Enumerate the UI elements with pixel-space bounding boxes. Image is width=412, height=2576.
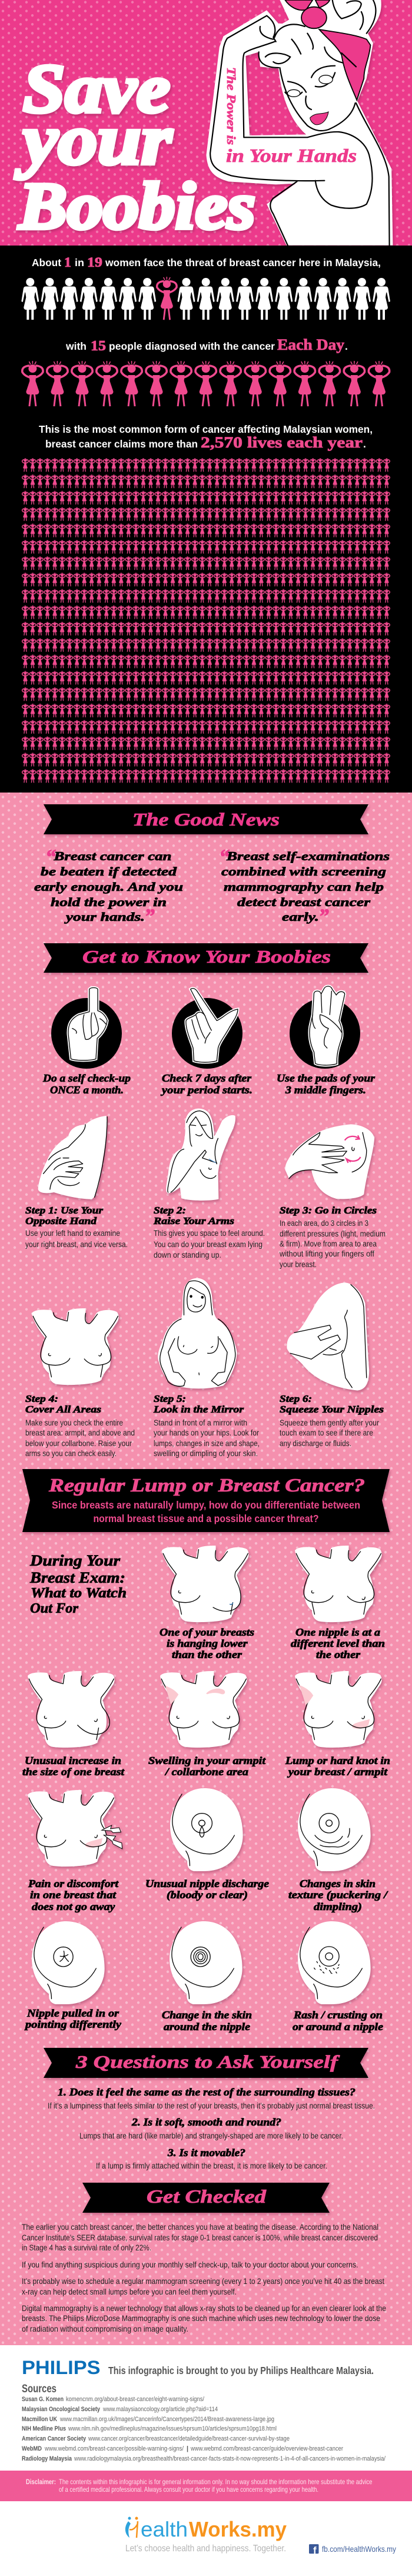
text: 2,570 lives each year: 2,570 lives each year <box>201 434 363 451</box>
symptom: rash: Rash / crusting on <box>293 2009 383 2021</box>
sources: WebMD <box>22 2445 42 2452</box>
sources: Radiology Malaysia <box>22 2455 72 2462</box>
text: 2,570 lives each year <box>39 423 373 451</box>
step 6 text <box>280 1393 384 1448</box>
step 4 text: Make sure you check the entire <box>25 1418 123 1427</box>
pictogram: 15 women <box>22 361 390 406</box>
symptom: skin around nipple: Change in the skin <box>162 2009 252 2021</box>
step 5 text <box>153 1393 260 1458</box>
logo: Philips: PHILIPS <box>22 2357 100 2378</box>
question 2: 2. Is it soft, smooth and round? <box>131 2116 281 2128</box>
banner: The Good News: The Good News <box>132 809 280 830</box>
quote: left: ” <box>144 904 155 928</box>
sources: | <box>187 2445 188 2452</box>
sources: www.nlm.nih.gov/medlineplus/magazine/issues/sprsum10/articles/sprsum10pg18.html <box>68 2425 277 2432</box>
step 1 text <box>25 1205 128 1249</box>
quote: right: ” <box>318 904 329 928</box>
symptom: discharge <box>145 1788 269 1901</box>
text: 1 in 19 women: 1 <box>64 255 71 270</box>
disclaimer band: of a certified medical professional. Always consult your doctor if you have concerns regarding your health. <box>59 2485 318 2494</box>
step 5 text: your hands on your hips. Look for <box>154 1428 259 1437</box>
text: get checked paragraphs <box>22 2222 386 2333</box>
step 1 text: your right breast, and vice versa. <box>25 1239 128 1249</box>
panel: hero <box>0 0 412 246</box>
quote: left: be beaten if detected <box>41 864 177 878</box>
symptom: discharge: Unusual nipple discharge <box>145 1878 269 1889</box>
question 2 <box>79 2116 343 2140</box>
quote: left: your hands. <box>64 910 145 924</box>
quote: right: early. <box>282 910 319 924</box>
step 3 text: & firm). Move from area to area <box>280 1239 377 1248</box>
symptom: one breast lower <box>160 1546 254 1660</box>
title: Save your Boobies: Save <box>23 50 170 127</box>
sources: www.webmd.com/breast-cancer/possible-warning-signs/ <box>44 2445 184 2452</box>
symptom: one breast lower: than the other <box>172 1649 242 1660</box>
quote: left: “ <box>45 845 56 868</box>
text: 2,570 lives each year: This is the most common form of cancer affecting Malaysian women, <box>39 423 373 435</box>
symptom: one breast lower: is hanging lower <box>167 1637 248 1649</box>
heading: During Your Breast Exam: Breast Exam: <box>29 1569 125 1586</box>
symptom: increase in size <box>22 1671 125 1778</box>
banner: Regular Lump or Breast Cancer: normal breast tissue and a possible cancer threat? <box>93 1513 319 1524</box>
text: get checked paragraphs: If you find anything suspicious during your monthly self check-up, talk to your doctor about your concerns. <box>22 2260 358 2269</box>
captions: self check tips: Check 7 days after <box>162 1072 252 1084</box>
facebook link <box>309 2544 396 2556</box>
symptom: nipple different level: the other <box>316 1649 360 1660</box>
banner: The Good News <box>44 804 368 834</box>
symptom: skin texture: texture (puckering / <box>288 1889 389 1901</box>
step 6 text: Step 6: <box>280 1393 312 1404</box>
step 2 text: Raise Your Arms <box>153 1215 234 1226</box>
text: 2,570 lives each year: breast cancer claims more than <box>45 438 198 450</box>
question 1 <box>48 2086 375 2110</box>
question 3 <box>96 2147 327 2170</box>
symptom: lump: your breast / armpit <box>287 1766 388 1778</box>
banner: Get Checked: Get Checked <box>147 2186 267 2207</box>
banner: Regular Lump or Breast Cancer: Regular Lump or Breast Cancer? <box>48 1474 365 1496</box>
symptom: nipple different level: different level than <box>291 1637 385 1649</box>
step 6 text: Squeeze Your Nipples <box>280 1404 384 1415</box>
disclaimer band: Disclaimer: <box>26 2478 56 2486</box>
symptom: one breast lower: One of your breasts <box>160 1626 254 1638</box>
step 5 text: swelling or dimpling of your skin. <box>154 1448 258 1458</box>
symptom: skin around nipple <box>162 1921 252 2033</box>
sources: Macmillon UK <box>22 2416 57 2423</box>
pictogram: 1 in 19 women <box>21 277 390 320</box>
symptom: increase in size: Unusual increase in <box>25 1755 121 1766</box>
quote: left: early enough. And you <box>34 880 183 894</box>
facebook link: fb.com/HealthWorks.my <box>322 2544 396 2554</box>
captions: self check tips: ONCE a month. <box>50 1084 124 1096</box>
pictogram: grid of women <box>22 458 390 783</box>
symptom: nipple pulled in: pointing differently <box>24 2018 121 2030</box>
banner: Regular Lump or Breast Cancer <box>22 1469 390 1532</box>
step 4 text: Cover All Areas <box>25 1404 101 1415</box>
step 4 text <box>25 1393 135 1458</box>
step 5 text: Step 5: <box>154 1393 186 1404</box>
symptom: skin texture: dimpling) <box>314 1901 362 1912</box>
symptom: lump <box>285 1671 390 1778</box>
logo: HealthWorks.my: Let’s choose health and happiness. Together. <box>125 2544 286 2554</box>
symptom: discharge: (bloody or clear) <box>167 1889 248 1901</box>
text: 15 people each day: Each Day <box>277 336 344 353</box>
symptom: skin texture: Changes in skin <box>300 1878 376 1889</box>
heading: During Your Breast Exam: Out For <box>30 1601 79 1616</box>
step 4 text: below your collarbone. Raise your <box>25 1438 132 1448</box>
sources: NIH Medline Plus <box>22 2425 66 2432</box>
step 3 text: different pressures (light, medium <box>280 1229 386 1238</box>
banner: Regular Lump or Breast Cancer: Since breasts are naturally lumpy, how do you differentiate between <box>52 1499 360 1511</box>
symptom: rash <box>293 1921 383 2033</box>
symptom: pain: does not go away <box>32 1901 115 1912</box>
quote: right: “ <box>219 845 230 868</box>
symptom: nipple different level: One nipple is at a <box>295 1626 380 1638</box>
arm text: in Your Hands: in Your Hands <box>226 145 357 166</box>
question 1: 1. Does it feel the same as the rest of the surrounding tissues? <box>58 2086 355 2098</box>
icon: two finger hand <box>172 989 242 1069</box>
step 2 text: You can do your breast exam lying <box>154 1239 263 1249</box>
sources: www.macmillan.org.uk/Images/Cancerinfo/Cancertypes/2014/Breast-awareness-large.jpg <box>59 2416 274 2423</box>
text: 1 in 19 women: in <box>75 257 84 268</box>
illustration: step 1 <box>38 1116 107 1199</box>
heading: During Your Breast Exam <box>29 1552 127 1616</box>
question 3: 3. Is it movable? <box>167 2147 245 2159</box>
sources: Sources <box>22 2383 57 2395</box>
facebook link: f <box>313 2545 317 2556</box>
logo: HealthWorks.my: ealth <box>141 2517 188 2541</box>
sources <box>22 2383 386 2462</box>
symptom: swelling armpit: Swelling in your armpit <box>148 1755 266 1766</box>
text: get checked paragraphs: in Stage 4 has a survival rate of only 22%. <box>22 2243 151 2252</box>
sources: www.malaysiaoncology.org/article.php?aid=114 <box>102 2406 218 2413</box>
illustration: pin-up woman flexing arm <box>206 0 393 246</box>
question 2: Lumps that are hard (like marble) and strangely-shaped are more likely to be cancer. <box>79 2131 343 2140</box>
step 5 text: Stand in front of a mirror with <box>154 1418 247 1427</box>
step 5 text: lumps, changes in size and shape, <box>154 1438 260 1448</box>
text: 1 in 19 women: 19 <box>87 255 102 270</box>
title: Save your Boobies: Boobies <box>18 170 255 243</box>
sources: www.webmd.com/breast-cancer/guide/overview-breast-cancer <box>190 2445 343 2452</box>
sources: komencnm.org/about-breast-cancer/eight-warning-signs/ <box>66 2396 205 2403</box>
illustration: step 6 <box>287 1282 369 1391</box>
text: get checked paragraphs: of radiation without compromising on image quality. <box>22 2324 188 2333</box>
step 3 text: without lifting your fingers off <box>279 1249 374 1258</box>
text: 2,570 lives each year: . <box>363 438 366 450</box>
quote: right: Breast self-examinations <box>226 849 390 863</box>
captions: self check tips: your period starts. <box>161 1084 252 1096</box>
text: 15 people each day: 15 <box>91 339 106 354</box>
text: 1 in 19 women: About <box>32 257 61 268</box>
sources: www.cancer.org/cancer/breastcancer/detailedguide/breast-cancer-survival-by-stage <box>88 2435 290 2442</box>
quote: right: mammography can help <box>224 880 384 894</box>
symptom: swelling armpit <box>148 1671 266 1778</box>
quote: left: hold the power in <box>51 895 167 909</box>
quote: left: Breast cancer can <box>53 849 172 863</box>
step 2 text: down or standing up. <box>154 1250 221 1259</box>
text: 15 people each day: people diagnosed with the cancer <box>109 340 275 352</box>
question 3: If a lump is firmly attached within the breast, it is more likely to be cancer. <box>96 2161 327 2170</box>
banner: 3 Questions to Ask Yourself: 3 Questions to Ask Yourself <box>75 2051 340 2072</box>
banner: 3 Questions to Ask Yourself <box>44 2048 368 2078</box>
symptom: pain: Pain or discomfort <box>28 1878 119 1889</box>
text: get checked paragraphs: x-ray can help detect small lumps before you can feel them yourself. <box>22 2287 237 2296</box>
step 3 text: your breast. <box>280 1259 317 1269</box>
symptom: swelling armpit: / collarbone area <box>164 1766 248 1778</box>
sources: Susan G. Komen <box>22 2396 64 2403</box>
sources: Malaysian Oncological Society <box>22 2406 101 2413</box>
step 2 text <box>153 1205 265 1259</box>
step 4 text: arms so you can check easily. <box>25 1448 117 1458</box>
step 6 text: Squeeze them gently after your <box>280 1418 379 1427</box>
logo: HealthWorks.my: Works.my <box>189 2517 287 2541</box>
symptom: increase in size: the size of one breast <box>22 1766 125 1778</box>
banner: Get Checked <box>82 2183 330 2213</box>
step 2 text: This gives you space to feel around. <box>154 1228 265 1238</box>
symptom: pain <box>28 1790 122 1912</box>
captions: self check tips: Use the pads of your <box>277 1072 376 1084</box>
text: 1 in 19 women <box>32 255 381 270</box>
icon: three finger hand <box>290 986 360 1069</box>
panel: pink content background <box>0 793 412 2345</box>
symptom: skin texture <box>288 1788 389 1912</box>
quote: right: combined with screening <box>221 864 386 878</box>
text: 15 people each day: . <box>345 340 348 352</box>
captions: self check tips: 3 middle fingers. <box>285 1084 366 1096</box>
quote: right <box>219 845 390 928</box>
symptom: lump: Lump or hard knot in <box>285 1755 390 1766</box>
symptom: nipple pulled in <box>24 1921 121 2030</box>
sources: American Cancer Society <box>22 2435 87 2442</box>
captions: self check tips: Do a self check-up <box>42 1072 131 1084</box>
symptom: rash: or around a nipple <box>293 2021 383 2033</box>
illustration: step 3 <box>285 1124 374 1199</box>
step 3 text: In each area, do 3 circles in 3 <box>280 1218 368 1228</box>
step 6 text: touch exam to see if there are <box>280 1428 373 1437</box>
step 1 text: Opposite Hand <box>25 1215 97 1226</box>
step 2 text: Step 2: <box>154 1205 186 1216</box>
panel: statistics <box>0 246 412 793</box>
text: 15 people each day: with <box>65 340 87 352</box>
icon: one finger hand <box>51 988 122 1069</box>
illustration: step 5 <box>158 1278 237 1388</box>
step 5 text: Look in the Mirror <box>153 1404 244 1415</box>
symptom: nipple pulled in: Nipple pulled in or <box>26 2007 119 2019</box>
symptom: nipple different level <box>291 1546 385 1660</box>
symptom: skin around nipple: around the nipple <box>164 2021 250 2033</box>
text: 1 in 19 women: women face the threat of breast cancer here in Malaysia, <box>105 257 381 268</box>
symptom: pain: in one breast that <box>30 1889 117 1901</box>
title: Save your Boobies <box>15 50 255 243</box>
heading: During Your Breast Exam: What to Watch <box>31 1586 127 1601</box>
arm text: The Power is: The Power is <box>224 67 238 145</box>
banner: Get to Know Your Boobies: Get to Know Your Boobies <box>82 946 331 967</box>
step 1 text: Use your left hand to examine <box>25 1228 120 1238</box>
banner: Get to Know Your Boobies <box>44 943 368 973</box>
heading: During Your Breast Exam: During Your <box>29 1552 121 1569</box>
quote: right: detect breast cancer <box>237 895 371 909</box>
captions: self check tips <box>42 1072 376 1096</box>
step 3 text <box>279 1205 386 1269</box>
text: 15 people each day <box>65 336 348 354</box>
step 1 text: Step 1: Use Your <box>25 1205 103 1216</box>
step 6 text: any discharge or fluids. <box>280 1438 351 1448</box>
illustration: step 4 <box>32 1308 119 1385</box>
logo: HealthWorks.my <box>125 2517 287 2554</box>
step 4 text: breast area: armpit, and above and <box>25 1428 135 1437</box>
step 3 text: Step 3: Go in Circles <box>280 1205 377 1216</box>
quote: left <box>34 845 183 928</box>
illustration: step 2 <box>166 1109 235 1201</box>
title: Save your Boobies: your <box>15 100 173 180</box>
disclaimer band <box>0 2471 412 2501</box>
step 4 text: Step 4: <box>25 1393 58 1404</box>
